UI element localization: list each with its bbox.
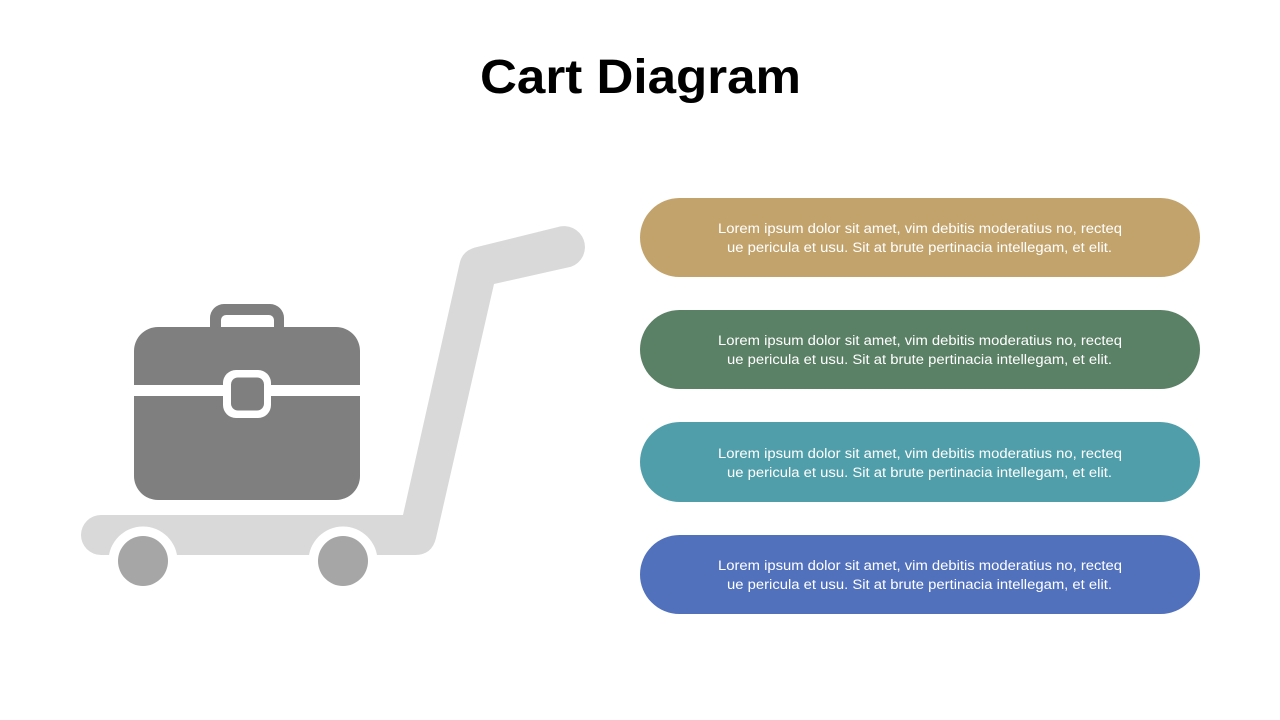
briefcase buckle [223,370,271,418]
panel: blue text pill: Lorem ipsum dolor sit amet, vim debitis moderatius no, recteq [718,558,1122,573]
panel: teal text pill: Lorem ipsum dolor sit amet, vim debitis moderatius no, recteq [718,446,1122,461]
panel: green text pill [640,310,1200,389]
panel: green text pill: ue pericula et usu. Sit at brute pertinacia intellegam, et elit. [727,352,1112,367]
rear wheel [318,536,368,586]
panel: blue text pill: ue pericula et usu. Sit at brute pertinacia intellegam, et elit. [727,577,1112,592]
panel: tan text pill [640,198,1200,277]
briefcase body [134,327,360,500]
icon: briefcase [134,304,360,500]
panel: tan text pill: ue pericula et usu. Sit at brute pertinacia intellegam, et elit. [727,240,1112,255]
wheel clearance cutouts [108,526,378,596]
briefcase strap [134,385,360,396]
cart frame and handle [81,226,585,555]
panel: teal text pill [640,422,1200,502]
panel: green text pill: Lorem ipsum dolor sit amet, vim debitis moderatius no, recteq [718,333,1122,348]
panel: blue text pill [640,535,1200,614]
panel: tan text pill: Lorem ipsum dolor sit amet, vim debitis moderatius no, recteq [718,221,1122,236]
briefcase handle [210,304,284,330]
front wheel [118,536,168,586]
illustration: luggage cart [81,226,585,595]
title: Cart Diagram [480,51,801,104]
panel: teal text pill: ue pericula et usu. Sit at brute pertinacia intellegam, et elit. [727,465,1112,480]
